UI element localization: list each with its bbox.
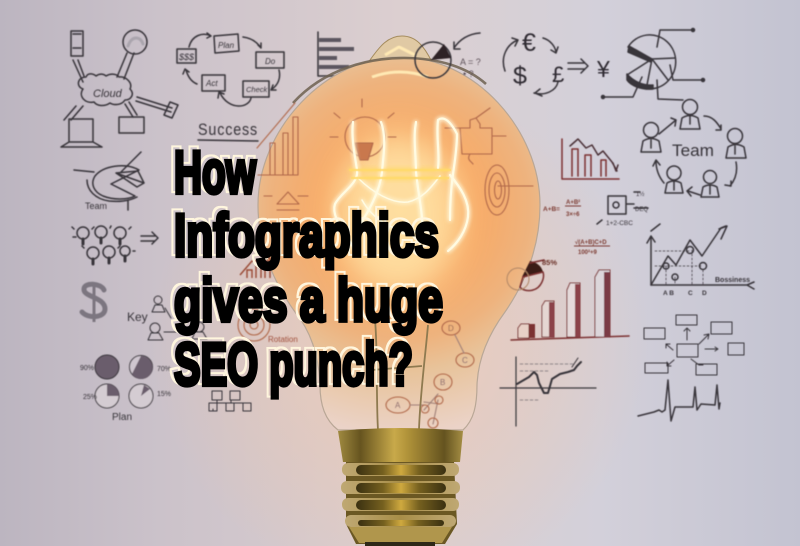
sketch: team cycle: Team — [672, 141, 714, 160]
sketch: business line graph: Bossiness — [715, 277, 750, 284]
sketch: dollar sign — [82, 284, 105, 322]
sketch: formula and gear box: 3×÷6 — [566, 212, 580, 218]
sketch: currency exchange: £ — [552, 62, 564, 87]
sketch: question marks: A = ? — [460, 57, 481, 67]
sketch: formula and gear box — [543, 191, 648, 227]
sketch: horizontal bar chart — [318, 32, 358, 76]
title line 1: How — [174, 139, 256, 206]
sketch: business line graph: C — [688, 290, 693, 297]
bright core glow — [336, 133, 460, 297]
sketch: square root formula — [574, 239, 610, 256]
sketch: key label: Key — [127, 310, 148, 324]
sketch: percent pie charts: 25% — [83, 394, 97, 401]
sketch: question marks — [460, 57, 481, 79]
sketch: target — [485, 165, 533, 215]
sketch: team cycle — [641, 100, 746, 197]
sketch: triangle diagram — [264, 192, 308, 210]
sketch: letter nodes: C — [462, 356, 468, 365]
title line 4: SEO punch? — [174, 331, 413, 398]
sketches seen through the glass — [238, 99, 533, 428]
sketch: letter nodes: B — [440, 378, 445, 387]
hand-drawn sketches, right side — [415, 28, 754, 426]
sketch: plan do check act cycle: $$$ — [178, 52, 195, 62]
sketch: formula and gear box: A+B² — [566, 199, 580, 206]
sketch: rising bar chart — [511, 270, 629, 340]
sketch: team pie chart: Team — [85, 201, 107, 211]
sketch: question marks: • ? — [463, 69, 474, 79]
sketch: idea bulbs — [72, 226, 158, 264]
sketch: currency exchange — [503, 29, 610, 96]
sketch: growth bars — [257, 103, 298, 175]
sketch: business line graph: A B — [663, 290, 674, 297]
sketch: cloud network — [61, 30, 178, 147]
sketch: plan do check act cycle — [177, 33, 284, 106]
sketch: currency exchange: € — [522, 29, 536, 57]
bulb tip — [370, 36, 432, 62]
sketch: currency exchange: $ — [513, 62, 527, 90]
title with offset cream outline — [174, 139, 443, 398]
sketch: letter nodes: D — [448, 324, 454, 333]
sketch: letter nodes — [386, 321, 474, 428]
brass collar — [338, 428, 463, 462]
sketch: formula and gear box: DEQ — [635, 207, 648, 213]
dark shoulder band — [293, 58, 486, 103]
sketch: business line graph — [647, 224, 754, 297]
sketch: rotation label: Rotation — [268, 335, 298, 344]
sketch: small red bars — [240, 258, 270, 278]
light bulb — [238, 36, 540, 546]
sketch: org chart — [209, 391, 251, 411]
title line 3: gives a huge — [174, 267, 443, 334]
sketch: percent pie charts: 70% — [157, 366, 171, 373]
sketch: plan do check act cycle: Act — [205, 79, 218, 88]
sketch: red pie with percent: 85% — [542, 258, 557, 267]
sketch: pulse line — [638, 380, 720, 421]
sketch: box flow diagram — [644, 315, 744, 375]
sketch: red falling bar chart — [562, 139, 619, 179]
sketch: stock line chart — [500, 357, 596, 426]
sketch: cloud network: Cloud — [93, 88, 123, 100]
sketch: formula and gear box: 1½ — [636, 191, 644, 198]
sketch: business line graph: D — [702, 290, 707, 297]
sketch: letter nodes: A — [395, 401, 401, 410]
sketch: formula and gear box: 1+2-CBC — [606, 220, 633, 227]
title line 2: Infographics — [174, 202, 439, 269]
sketch: square root formula: √(A+B)C+D — [575, 239, 607, 246]
sketch: formula and gear box: A+B= — [543, 206, 560, 213]
screw thread — [341, 462, 460, 546]
filament — [334, 119, 468, 251]
sketch: percent pie charts: 90% — [80, 365, 94, 372]
sketch: idea bulb — [330, 99, 396, 160]
sketch: low target — [238, 309, 270, 341]
sketch: plan do check act cycle: Do — [265, 57, 276, 66]
filament support wires — [372, 310, 428, 430]
sketch: key people — [148, 296, 207, 340]
sketch: percent pie charts: Plan — [112, 412, 132, 423]
sketch: team pie chart — [74, 152, 144, 211]
sketch: currency exchange: ¥ — [596, 56, 610, 82]
sketch: plan do check act cycle: Plan — [218, 41, 235, 50]
sketch: red pie with percent — [507, 258, 557, 291]
sketch: percent pie charts: 15% — [157, 391, 171, 398]
hand-drawn sketches, left side — [61, 30, 358, 423]
sketch: success heading: Success — [198, 120, 258, 139]
sketch: percent pie charts — [80, 355, 171, 423]
sketch: plan do check act cycle: Check — [246, 85, 269, 94]
sketch: small pie over bulb — [415, 33, 480, 78]
sketch: puzzle pieces — [445, 108, 506, 164]
bulb glass — [258, 57, 540, 430]
sketch: square root formula: 100²+9 — [578, 249, 598, 256]
sketch: large pie chart — [602, 28, 704, 100]
reflection in tip — [372, 47, 428, 77]
